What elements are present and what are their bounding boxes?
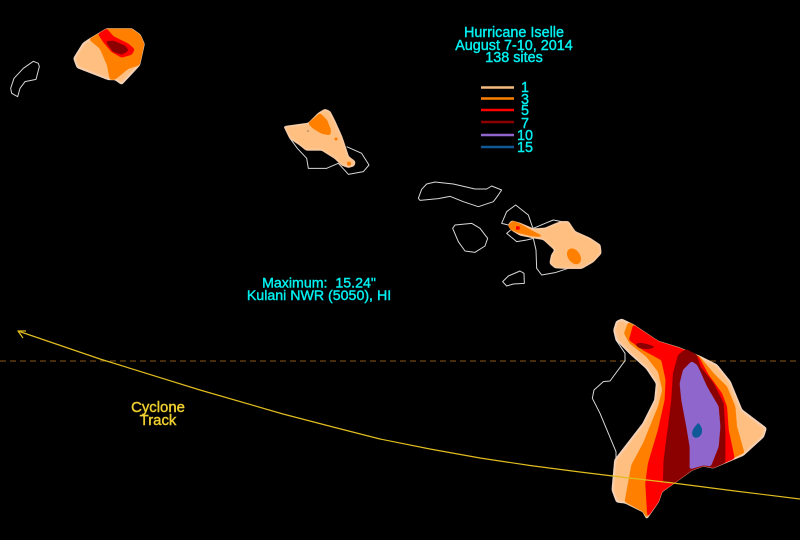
title block: Hurricane Iselle [464, 25, 564, 41]
maximum rainfall note [247, 276, 391, 304]
island: Hawaii with rainfall bands [592, 319, 766, 518]
west coast outline [592, 322, 625, 460]
track arrowhead [18, 331, 26, 338]
island: Maui with rainfall [502, 205, 601, 275]
rainfall band: 3 inches [624, 323, 744, 517]
cyclone track label: Track [140, 413, 177, 429]
rainfall band: 10 inches [680, 362, 720, 469]
legend [481, 80, 533, 156]
title block: 138 sites [485, 50, 543, 66]
legend: 1 [521, 80, 529, 96]
island: Niihau outline [11, 61, 39, 97]
title block [455, 25, 573, 66]
island: Oahu with rainfall [284, 109, 369, 174]
rainfall band: 15 inches [692, 423, 702, 438]
legend: 3 [521, 92, 529, 108]
legend: 7 [521, 116, 529, 132]
title block: August 7-10, 2014 [455, 38, 573, 54]
cyclone track label: Cyclone [131, 400, 185, 416]
rainfall band: 7 inches [663, 349, 725, 483]
rainfall band: 5 inches [629, 325, 734, 517]
legend: 15 [517, 140, 533, 156]
island: Kauai with rainfall [74, 29, 144, 84]
legend: 10 [517, 128, 533, 144]
maximum rainfall note: Maximum: 15.24" [262, 276, 376, 292]
maximum rainfall note: Kulani NWR (5050), HI [247, 288, 391, 304]
island: Molokai, Lanai and Kahoolawe outlines [418, 182, 524, 286]
cyclone track label [131, 400, 185, 429]
legend: 5 [521, 103, 529, 119]
cyclone track [18, 331, 800, 499]
rainfall spot: 7 inches north [636, 343, 654, 349]
rainfall band: 1 inch [612, 319, 766, 518]
